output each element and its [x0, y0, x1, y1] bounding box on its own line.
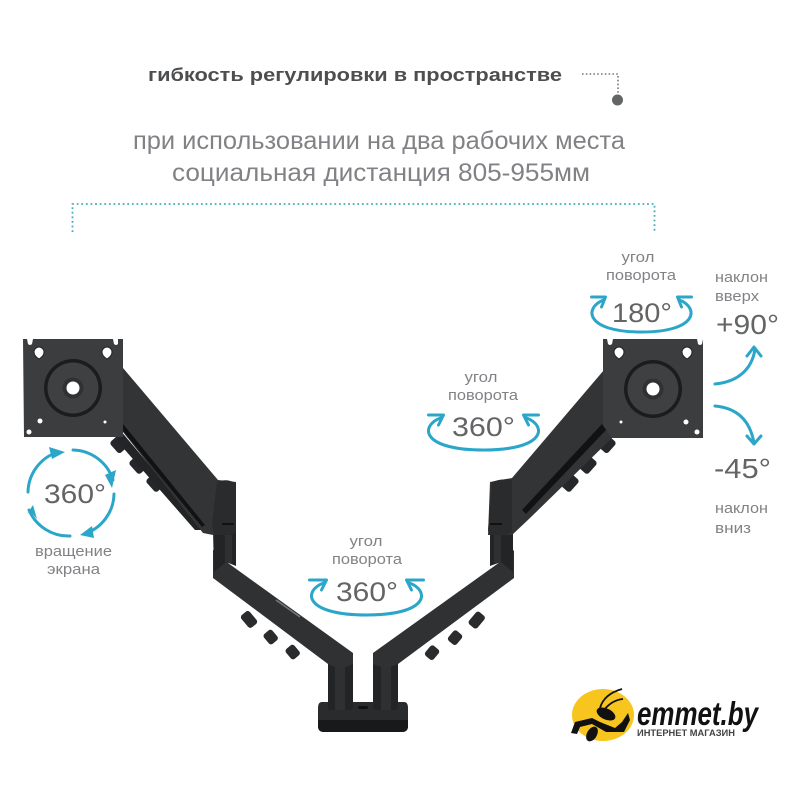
right arm body	[488, 370, 613, 535]
left bracket	[118, 430, 204, 530]
heading marker	[582, 74, 623, 106]
rotation ring	[27, 447, 116, 538]
clamp base	[318, 702, 408, 732]
callout: screen rotation 360: вращение	[35, 543, 112, 560]
callout: plate swivel 180: поворота	[606, 267, 677, 284]
callout: arm swivel 360	[428, 369, 539, 450]
callout: middle swivel 360: поворота	[332, 551, 403, 568]
callout: plate swivel 180: угол	[622, 249, 654, 266]
distance bracket	[72, 204, 654, 232]
callout: tilt up +90	[715, 269, 779, 384]
left arm body	[123, 368, 236, 535]
logo: ИНТЕРНЕТ МАГАЗИН	[637, 728, 735, 739]
callout: arm swivel 360: 360°	[452, 412, 515, 442]
callout: tilt down -45	[714, 406, 771, 537]
monitor arm: base and lower arms	[213, 530, 514, 732]
left plate	[23, 339, 123, 437]
lower left knobs	[240, 610, 301, 661]
callout: tilt up +90: +90°	[716, 309, 779, 340]
left elbow	[212, 480, 236, 535]
subtitle: социальная дистанция 805-955мм	[172, 159, 590, 187]
callout: tilt down -45: вниз	[715, 520, 751, 537]
subtitle	[133, 127, 625, 187]
subtitle: при использовании на два рабочих места	[133, 127, 625, 155]
callout: screen rotation 360: экрана	[47, 561, 101, 578]
callout: arm swivel 360: угол	[464, 369, 498, 386]
callout: plate swivel 180: 180°	[612, 298, 672, 328]
logo	[571, 689, 759, 743]
right post	[373, 653, 398, 710]
heading: гибкость регулировки в пространстве	[148, 65, 562, 85]
icon: bee	[571, 689, 634, 743]
right lower post	[490, 530, 513, 572]
callout: tilt down -45: -45°	[714, 453, 771, 484]
callout: tilt down -45: наклон	[715, 500, 768, 517]
callout: plate swivel 180	[592, 249, 692, 332]
callout: middle swivel 360	[310, 533, 424, 615]
marks on lower left arm	[276, 600, 300, 617]
lower right knobs	[424, 610, 486, 661]
right elbow	[488, 479, 512, 535]
callout: tilt up +90: наклон	[715, 269, 768, 286]
right knobs	[560, 435, 617, 493]
callout: arm swivel 360: поворота	[448, 387, 519, 404]
left post	[328, 653, 353, 710]
right plate	[603, 339, 703, 438]
callout: screen rotation 360: 360°	[44, 479, 106, 509]
logo: emmet.by	[637, 695, 759, 732]
callout: middle swivel 360: 360°	[336, 577, 398, 607]
lower right arm	[373, 550, 514, 669]
callout: screen rotation 360	[27, 447, 116, 578]
callout: tilt up +90: вверх	[715, 288, 760, 305]
left upper arm and plate	[23, 339, 236, 535]
left knobs	[109, 435, 165, 493]
left lower post	[213, 530, 236, 572]
right upper arm and plate	[488, 339, 703, 535]
callout: middle swivel 360: угол	[350, 533, 382, 550]
lower left arm	[213, 550, 353, 669]
